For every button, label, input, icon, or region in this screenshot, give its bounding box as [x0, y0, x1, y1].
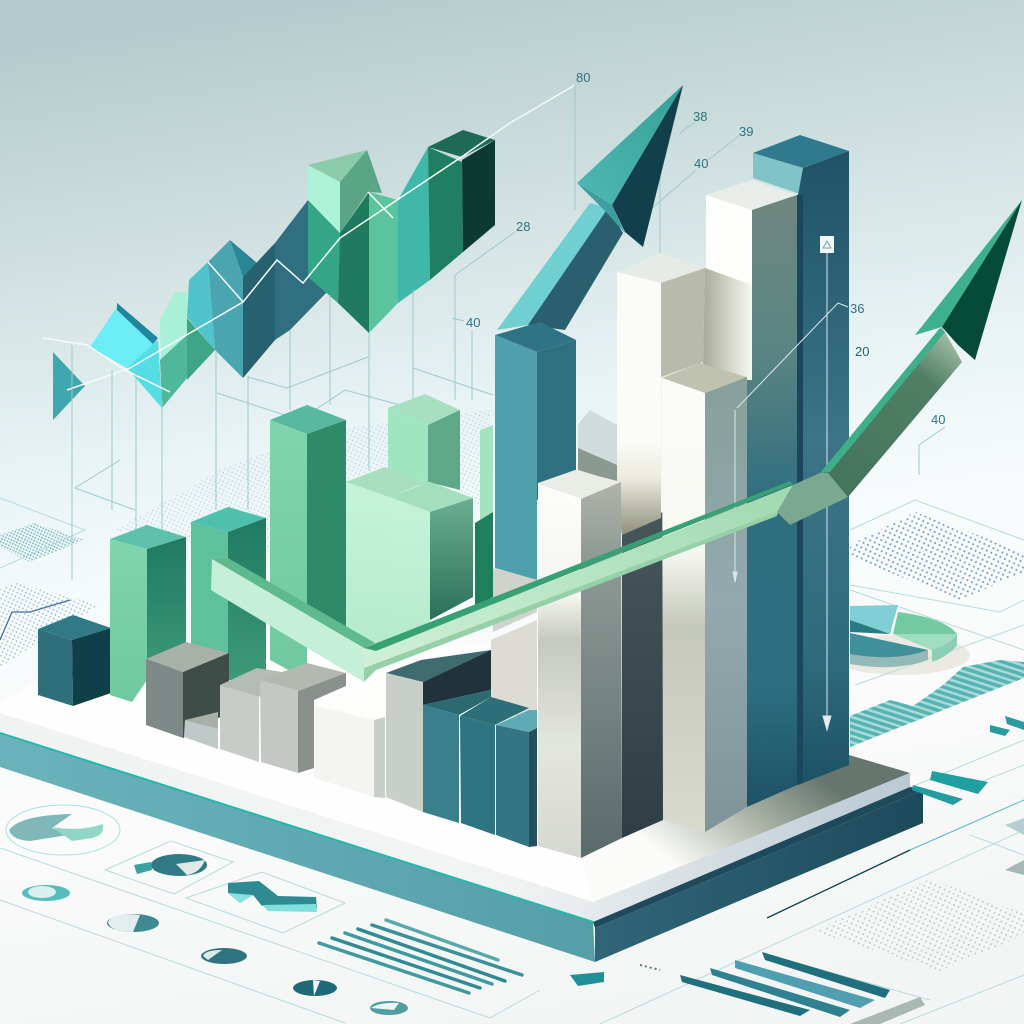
- bars: green left group: [38, 394, 493, 706]
- bars: low blocks: [146, 642, 537, 847]
- trend line: [43, 85, 575, 392]
- bottom stripes chart: [319, 920, 522, 993]
- wall behind low blocks: [491, 568, 537, 725]
- mint bar back: [388, 394, 460, 490]
- axis labels: 80: [576, 70, 590, 85]
- arrow up shaft: [497, 203, 608, 330]
- shape C: [228, 881, 317, 912]
- mint bar front: [389, 482, 473, 650]
- axis labels: [466, 70, 945, 427]
- green bar 1: [110, 525, 186, 702]
- striped wave bars right: [850, 660, 1024, 747]
- axis labels: 40: [931, 412, 945, 427]
- platform: [0, 640, 923, 962]
- axis labels: 40: [694, 156, 708, 171]
- right small bars: [912, 716, 1024, 805]
- bar: tall teal column: [753, 135, 849, 785]
- bar: white column 3: [662, 363, 747, 832]
- green bar 2: [191, 507, 266, 680]
- dark cube: [38, 615, 111, 706]
- bar: white tall column 2: [703, 180, 797, 807]
- right grey panels: [1005, 818, 1024, 875]
- axis labels: 38: [693, 109, 707, 124]
- floor sheets and dotted fields: [0, 410, 1024, 1024]
- pie A bottom-left: [6, 805, 120, 855]
- small grey back block: [578, 410, 617, 482]
- green bar 3: [270, 405, 346, 680]
- axis labels: 40: [466, 315, 480, 330]
- small pies: [22, 885, 408, 1015]
- bar: white front column: [538, 470, 622, 858]
- bottom right stripes chart: [570, 952, 925, 1024]
- bar: white tall column 1: [617, 253, 705, 838]
- pie B: [134, 854, 207, 876]
- axis labels: 39: [739, 124, 753, 139]
- pie chart right: [830, 605, 970, 675]
- axis labels: 20: [855, 344, 869, 359]
- mint bar mid: [346, 467, 425, 650]
- icon: small left arrow: [53, 352, 85, 420]
- axis labels: 28: [516, 219, 530, 234]
- chart guide lines: [72, 85, 945, 580]
- axis labels: 36: [850, 301, 864, 316]
- bar: tall teal with arrow: [495, 85, 683, 580]
- large green trend arrow: [211, 200, 1022, 682]
- annotation lines on columns: [733, 236, 848, 730]
- panel: upper zigzag ribbon chart: [43, 85, 575, 420]
- arrow head: [577, 85, 683, 205]
